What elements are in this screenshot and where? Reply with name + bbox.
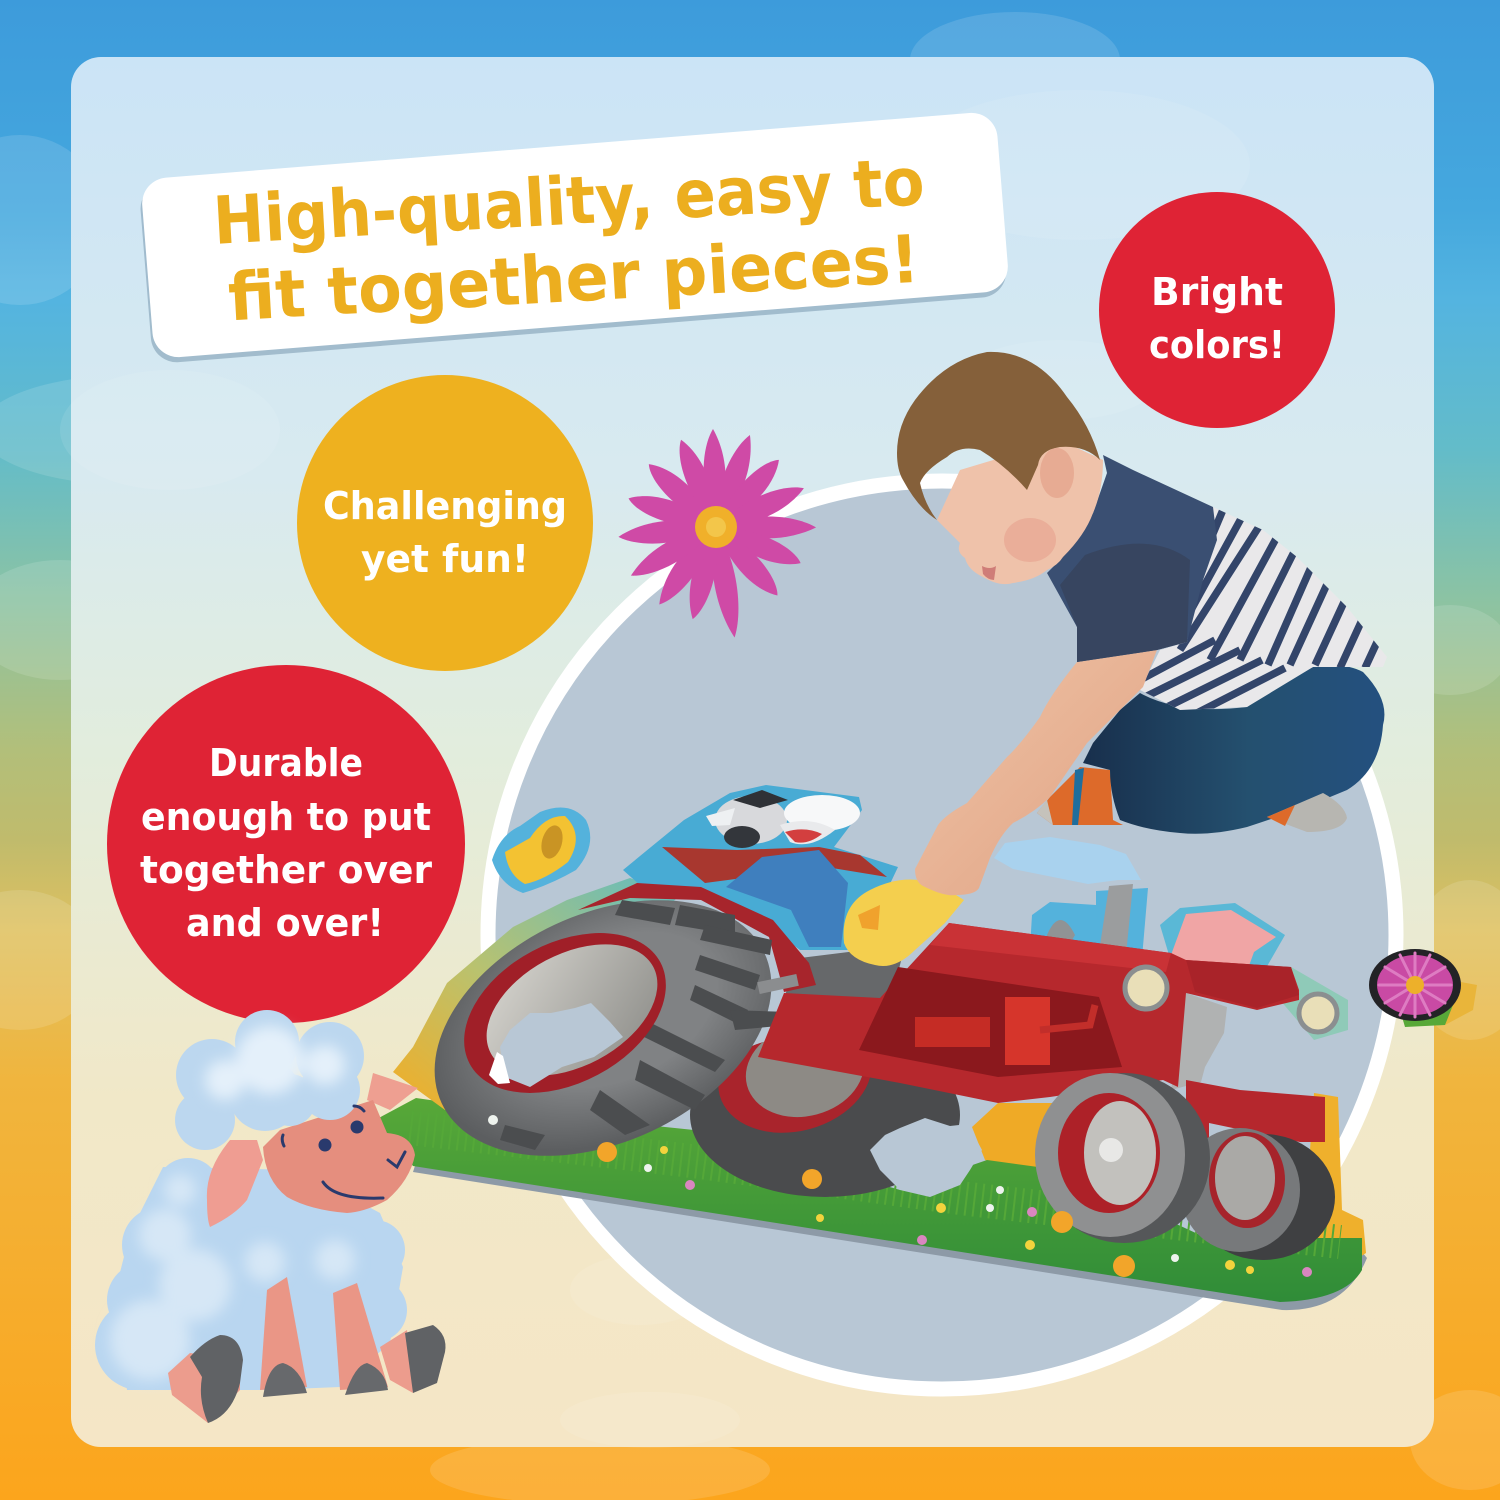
sheep: front legs and hooves	[260, 1277, 388, 1397]
sheep: eyes and smile	[282, 1106, 405, 1198]
puzzle: second rear tyre	[690, 1042, 960, 1197]
sheep: near ear	[207, 1140, 263, 1227]
child: cheek blush	[1004, 518, 1056, 562]
callout: durable: enough to put	[141, 795, 431, 839]
puzzle: headlights	[1125, 967, 1337, 1032]
sheep illustration	[95, 1010, 446, 1423]
puzzle: tractor body	[758, 923, 1299, 1103]
puzzle: engine bay	[859, 967, 1122, 1077]
callout: challenging yet fun: Challenging	[323, 484, 567, 528]
puzzle: exhaust and smoke	[994, 837, 1148, 958]
headline banner	[138, 111, 1010, 364]
sheep: back legs and hooves	[168, 1325, 446, 1423]
child: hair	[897, 352, 1100, 520]
sheep: wool head	[175, 1010, 364, 1150]
puzzle: rear fender	[578, 883, 816, 992]
puzzle: rear big tyre	[393, 849, 813, 1207]
puzzle: small daisy piece	[1369, 949, 1477, 1027]
child: mouth	[982, 566, 996, 580]
puzzle: tractor on grass	[375, 785, 1477, 1310]
child: near sock	[1267, 793, 1347, 832]
cow: spotted head	[715, 796, 787, 844]
puzzle: far front wheel	[1180, 1128, 1335, 1260]
child: jeans	[1083, 665, 1384, 834]
cow: blue backing	[623, 785, 898, 950]
callout: durable	[107, 665, 465, 1023]
callout: challenging yet fun	[297, 375, 593, 671]
puzzle: golden right edge	[1300, 1093, 1366, 1270]
puzzle: area behind chick	[785, 945, 905, 1005]
child: face	[937, 440, 1103, 584]
photo: child assembling the puzzle	[897, 352, 1387, 895]
puzzle: ground flowers	[488, 1115, 1312, 1277]
callout: bright colors: Bright	[1151, 270, 1283, 314]
puzzle: grass strip	[375, 1098, 1362, 1302]
puzzle: radiator grille	[1171, 993, 1227, 1090]
puzzle: missing piece hole two	[870, 1118, 982, 1197]
callout: durable: together over	[140, 848, 432, 892]
puzzle: board shadow	[413, 1150, 1367, 1310]
child: arm	[915, 650, 1157, 895]
callout: bright colors	[1099, 192, 1335, 428]
decorative big circle behind the child	[488, 481, 1396, 1389]
child: ear	[1040, 448, 1074, 498]
puzzle: edge band behind the rear wheel	[393, 878, 680, 1110]
cow: overalls	[726, 850, 848, 947]
puzzle: headlamp backing	[1280, 967, 1348, 1040]
headline banner: High-quality, easy to	[211, 143, 926, 260]
puzzle: pig	[1160, 903, 1285, 975]
cow: plaid shirt	[662, 847, 887, 883]
headline banner: fit together pieces!	[226, 221, 921, 336]
puzzle: yellow chick	[844, 880, 964, 966]
sheep: far ear	[367, 1073, 418, 1110]
puzzle: cow farmer	[623, 785, 898, 950]
puzzle: orange sky patch	[972, 1103, 1060, 1190]
sheep: face	[263, 1100, 415, 1213]
puzzle: front bumper	[1186, 1080, 1325, 1190]
callout: durable: Durable	[209, 741, 363, 785]
callout: challenging yet fun: yet fun!	[361, 537, 529, 581]
puzzle: missing piece hole	[500, 1003, 623, 1087]
child: striped shirt body	[1140, 505, 1387, 714]
puzzle: hat piece	[492, 808, 590, 893]
cow: white snout	[784, 795, 860, 831]
callout: bright colors: colors!	[1149, 323, 1285, 367]
puzzle: near front wheel	[1035, 1073, 1210, 1243]
child: far sock	[1037, 767, 1123, 825]
icon: pink daisy flower	[618, 429, 816, 639]
sheep: body wool	[95, 1158, 407, 1390]
callout: durable: and over!	[186, 901, 384, 945]
child: shirt shoulder and sleeve	[1047, 455, 1217, 662]
puzzle: grass blades	[410, 1128, 1340, 1242]
